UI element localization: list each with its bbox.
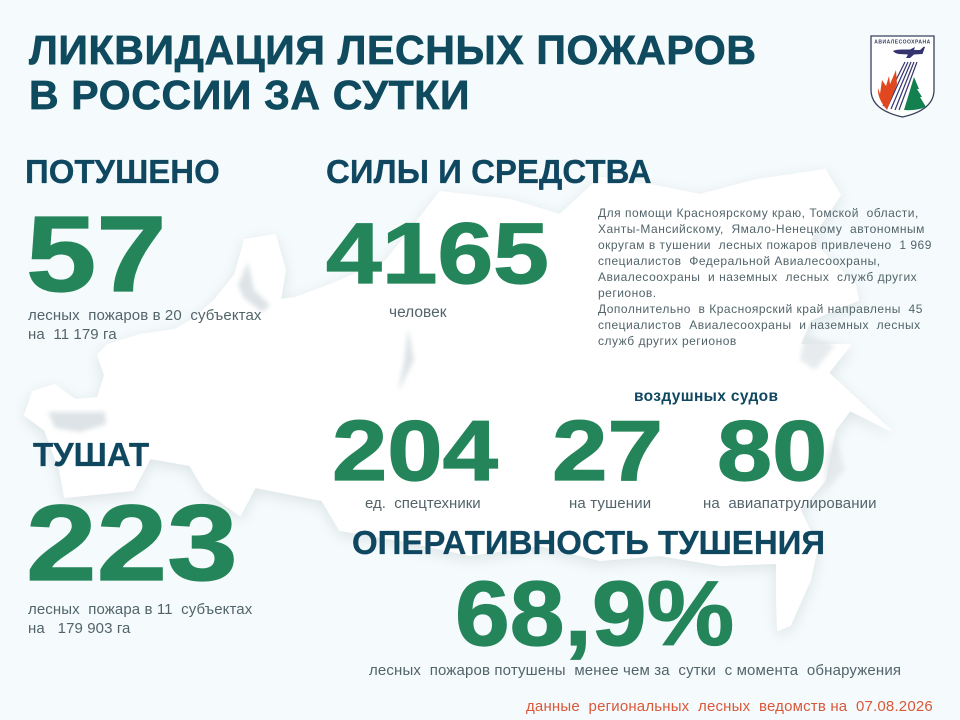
- number: 27: 27: [552, 404, 663, 499]
- text: people: человек: [389, 304, 446, 321]
- number: 68,9%: 68,9%: [455, 563, 734, 665]
- number: 57: 57: [26, 193, 167, 314]
- heading: response rate: ОПЕРАТИВНОСТЬ ТУШЕНИЯ: [352, 524, 825, 561]
- label: aircraft: воздушных судов: [634, 388, 778, 405]
- heading: forces and means: СИЛЫ И СРЕДСТВА: [326, 153, 652, 190]
- text: air patrol: на авиапатрулировании: [703, 495, 877, 512]
- title: ЛИКВИДАЦИЯ ЛЕСНЫХ ПОЖАРОВ В РОССИИ ЗА СУТКИ: [29, 27, 757, 118]
- text: fires extinguished: лесных пожаров в 20 субъектах на 11 179 га: [28, 307, 262, 343]
- text: special equipment: ед. спецтехники: [365, 495, 481, 512]
- text: response rate note: лесных пожаров потушены менее чем за сутки с момента обнаружения: [369, 662, 901, 679]
- icon: Avialesookhrana emblem: [870, 35, 935, 118]
- text: firefighting: на тушении: [569, 495, 651, 512]
- text: data source: данные региональных лесных ведомств на 07.08.2026: [526, 698, 933, 715]
- number: 80: 80: [717, 404, 827, 499]
- number: 4165: 4165: [326, 206, 549, 302]
- text: active fires: лесных пожара в 11 субъектах на 179 903 га: [28, 601, 252, 637]
- text: reinforcement note: Для помощи Красноярскому краю, Томской области, Ханты-Мансийскому, Ямало-Ненецкому автономным округам в тушении лесных пожаров привлечено 1 969 специалистов Федеральной Авиалесоохраны, Авиалесоохраны и наземных лесных служб других регионов. Дополнительно в Красноярский край направлены 45 специалистов Авиалесоохраны и наземных лесных служб других регионов: [598, 206, 932, 348]
- number: 204: 204: [332, 404, 498, 499]
- icon: Avialesookhrana emblem: АВИАЛЕСООХРАНА: [874, 40, 931, 46]
- heading: extinguished: ПОТУШЕНО: [25, 153, 220, 190]
- heading: being fought: ТУШАТ: [33, 436, 149, 473]
- number: 223: 223: [26, 482, 238, 603]
